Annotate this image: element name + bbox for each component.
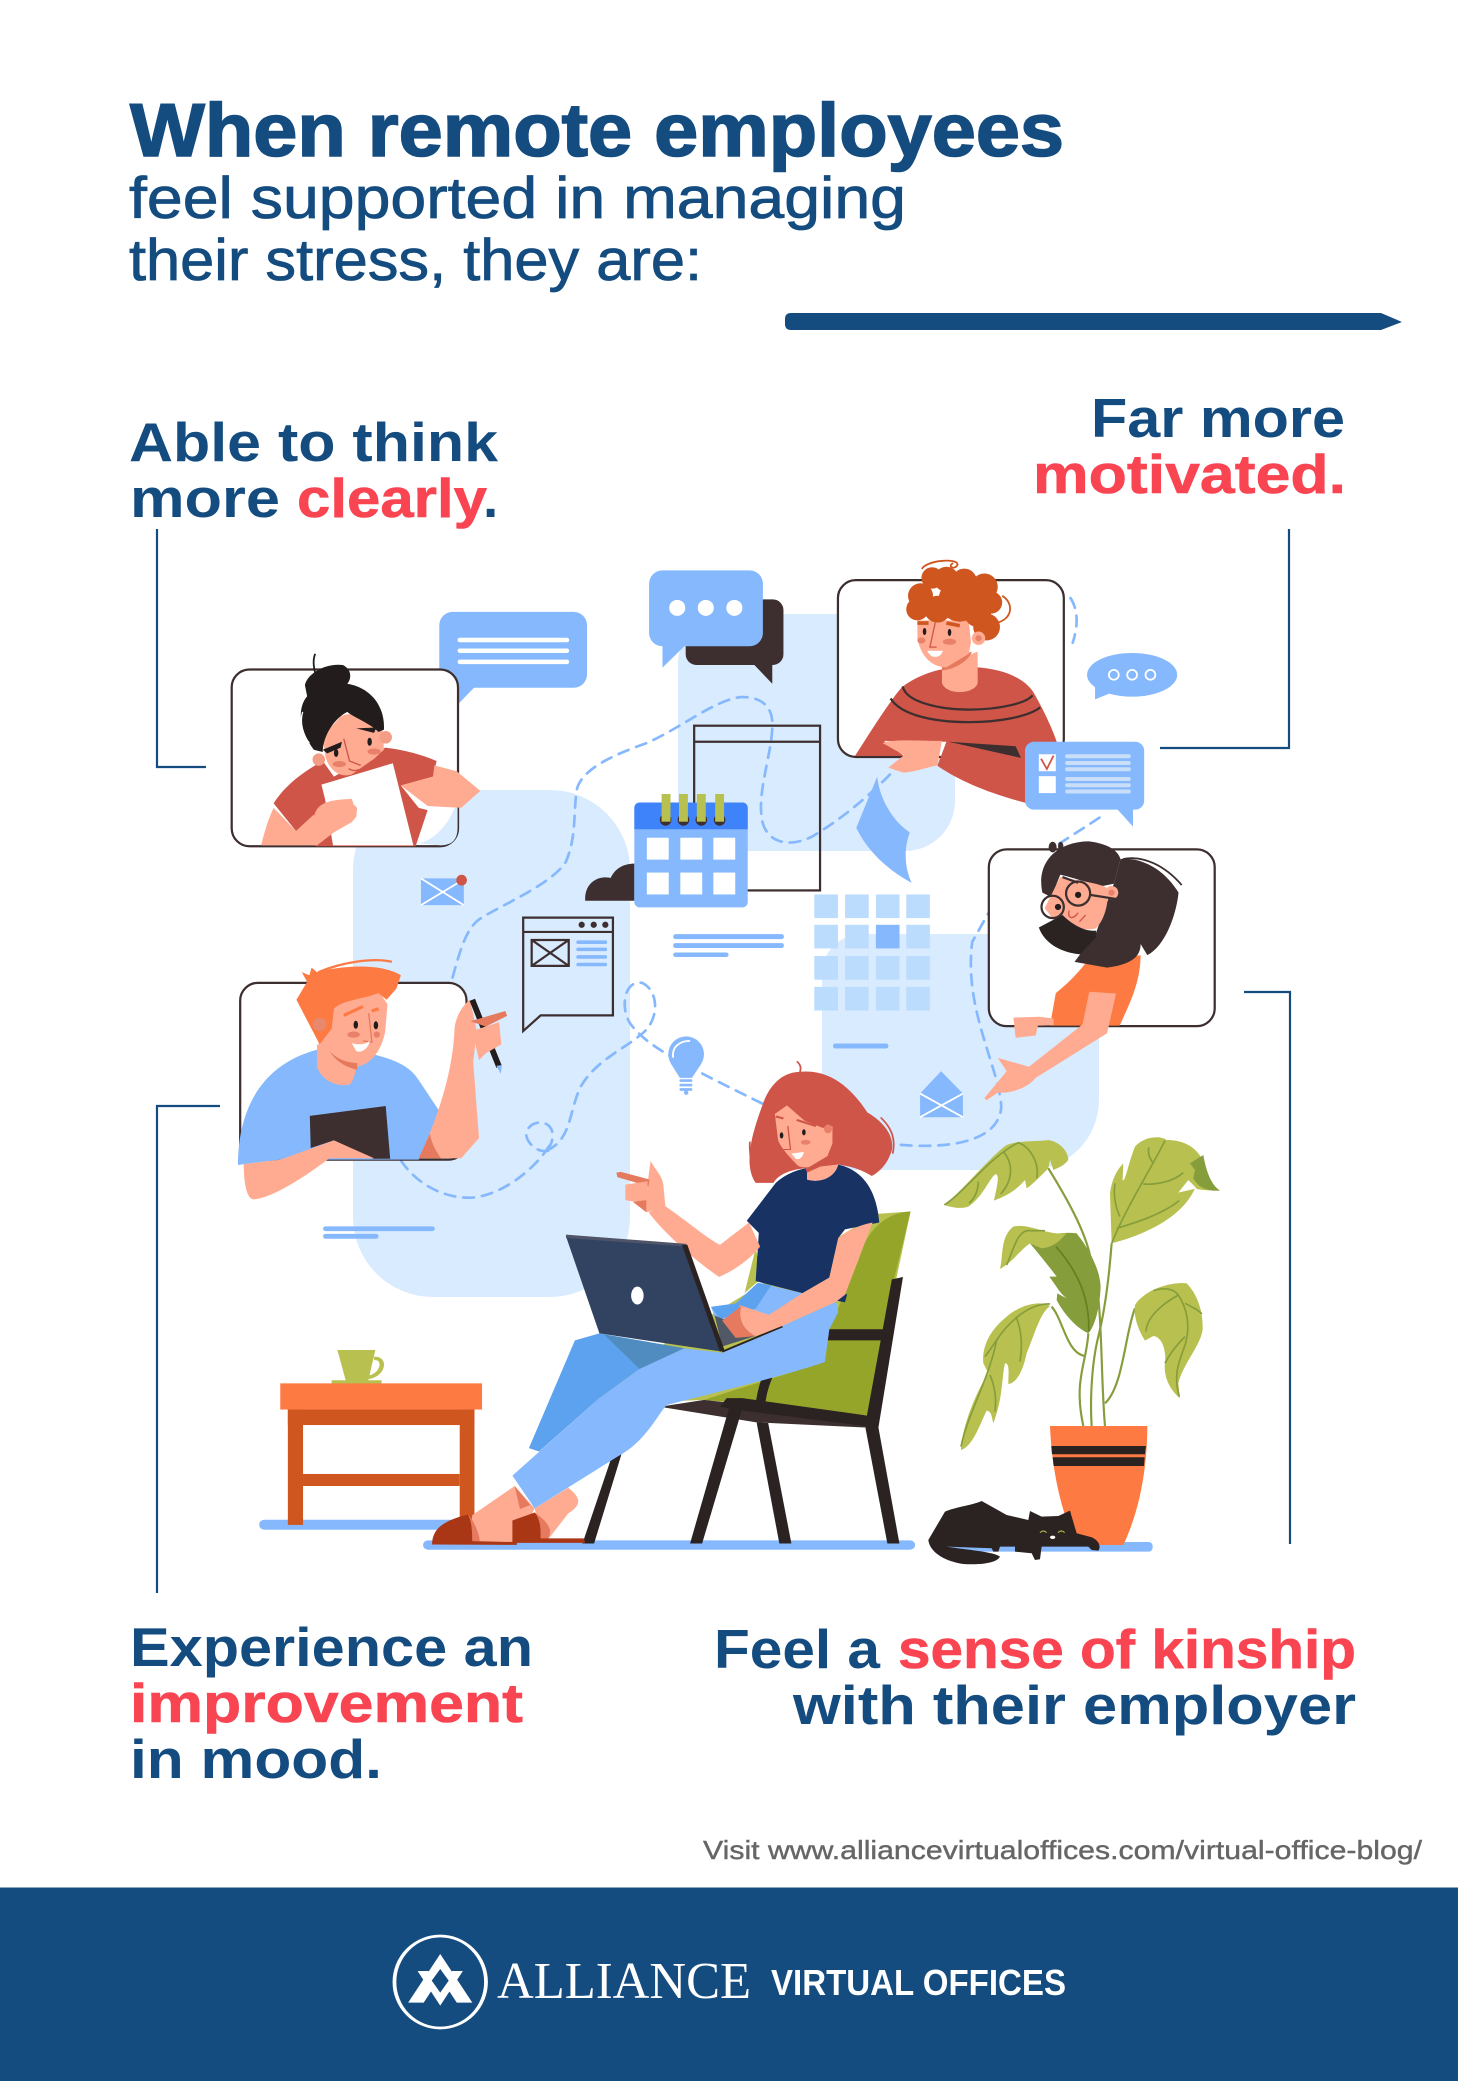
floor lines	[259, 1226, 915, 1550]
background panels	[353, 614, 1099, 1297]
pot	[1050, 1426, 1147, 1545]
black cat	[928, 1501, 1100, 1564]
title: their stress, they are:	[129, 228, 702, 293]
leaf: lower right	[1135, 1283, 1203, 1398]
leaf: lower left	[961, 1303, 1050, 1450]
heading: sense of kinship: Feel a	[714, 1618, 880, 1680]
leaf: top right	[1110, 1137, 1220, 1243]
typing arm	[722, 1223, 873, 1338]
website link: Visit www.alliancevirtualoffices.com/virtual-office-blog/	[703, 1835, 1423, 1865]
footer band	[0, 1888, 1458, 2081]
heading: sense of kinship: with their employer	[792, 1674, 1356, 1736]
raised arm and pointing hand	[616, 1161, 760, 1277]
laptop	[566, 1235, 782, 1369]
title	[129, 88, 1064, 293]
heading: think clearly	[129, 411, 498, 529]
icon: browser speech bubble	[523, 918, 613, 1031]
stems	[1048, 1168, 1135, 1426]
woman on laptop in chair	[432, 1061, 911, 1545]
heading: sense of kinship: sense of kinship	[898, 1618, 1356, 1680]
person: woman with hair bun and paper	[232, 654, 480, 846]
dashed connection paths	[401, 598, 1099, 1198]
back leg	[529, 1333, 684, 1452]
person: curly haired man	[838, 561, 1064, 804]
neck, hair and face	[749, 1061, 894, 1183]
person: man with orange hair and tablet	[238, 960, 507, 1199]
floor line	[947, 1542, 1153, 1552]
icon: speech bubbles	[649, 570, 783, 684]
heading: improvement in mood: Experience an	[130, 1616, 533, 1678]
front leg	[512, 1302, 838, 1508]
icon: open envelope	[920, 1071, 963, 1117]
heading: think clearly: .	[483, 467, 498, 529]
leaf: top left	[944, 1140, 1068, 1208]
icon: lightbulb	[668, 1036, 704, 1095]
blue speech tail shape	[856, 777, 912, 883]
logo: ALLIANCE	[497, 1953, 751, 2010]
potted plant	[928, 1137, 1220, 1564]
heading: think clearly: Able to think	[129, 411, 498, 473]
window outline	[694, 726, 820, 890]
speech bubble: ellipse dots	[1087, 653, 1177, 699]
logo emblem	[394, 1936, 486, 2028]
arrow bar	[785, 313, 1402, 330]
heading: improvement in mood: improvement	[130, 1672, 523, 1734]
torso	[747, 1165, 879, 1293]
heading: improvement in mood	[130, 1616, 533, 1790]
icon: pale grid	[814, 894, 930, 1048]
heading: think clearly: more	[130, 467, 280, 529]
connector lines	[157, 529, 1290, 1593]
person: woman with glasses	[984, 841, 1215, 1100]
chair	[582, 1212, 911, 1544]
speech bubble: checklist	[1025, 742, 1144, 827]
logo: VIRTUAL OFFICES	[771, 1962, 1066, 2003]
side table with cup	[280, 1350, 482, 1525]
feet and slippers	[432, 1486, 585, 1545]
icon: calendar with cloud	[585, 794, 784, 957]
title: When remote employees	[130, 88, 1064, 172]
heading: sense of kinship	[714, 1618, 1356, 1736]
heading: improvement in mood: in mood.	[130, 1728, 382, 1790]
logo	[394, 1936, 1066, 2028]
speech bubble: text lines	[439, 612, 587, 710]
title: feel supported in managing	[129, 166, 906, 231]
heading: motivated	[1033, 387, 1346, 505]
heading: motivated: Far more	[1091, 387, 1345, 449]
heading: think clearly: clearly	[297, 467, 487, 529]
icon: mail with notification	[421, 875, 467, 905]
heading: motivated: motivated.	[1033, 443, 1346, 505]
leaf: middle	[1000, 1226, 1101, 1333]
